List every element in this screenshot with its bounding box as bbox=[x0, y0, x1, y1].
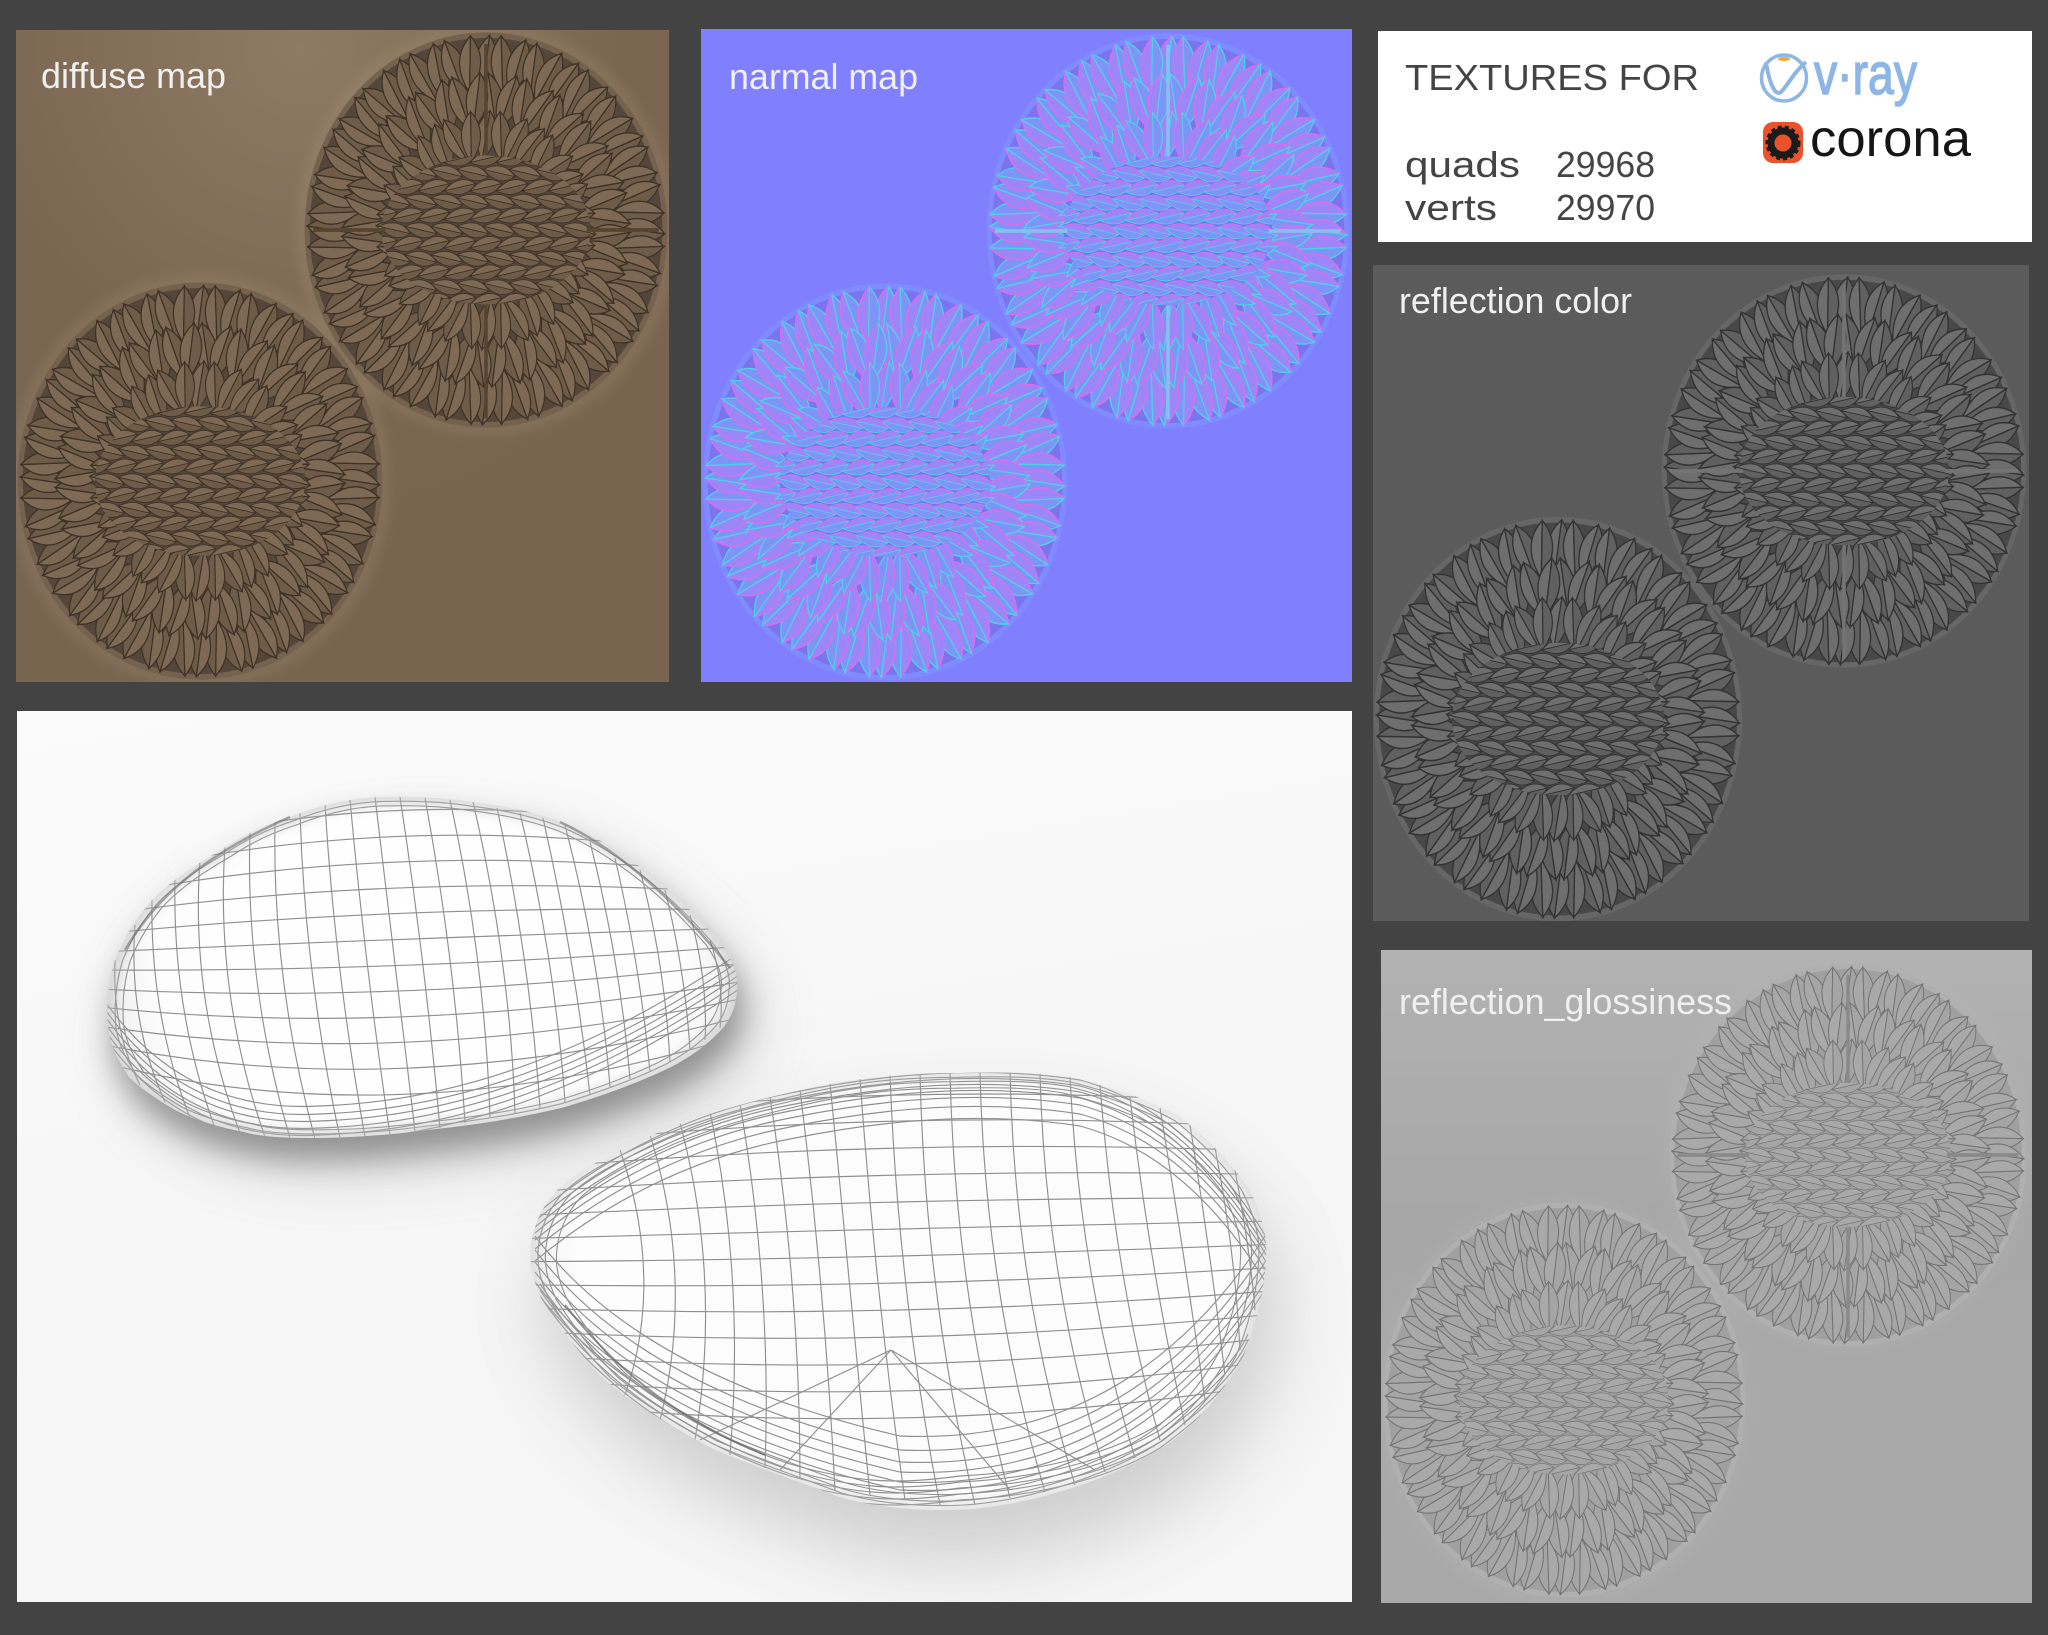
panel: reflection glossiness bbox=[1366, 946, 2043, 1616]
mesh: upper stone bbox=[100, 797, 745, 1142]
texture disc: lower bbox=[1384, 1204, 1744, 1596]
icon: v-ray logo: v·ray bbox=[1814, 42, 1917, 107]
label: reflection glossiness: reflection_glossiness bbox=[1399, 981, 1732, 1022]
text: verts value: 29970 bbox=[1556, 187, 1655, 228]
text: quads label: quads bbox=[1405, 144, 1520, 185]
panel: normal map bbox=[686, 15, 1366, 699]
texture disc: lower bbox=[703, 284, 1067, 680]
icon: corona logo: corona bbox=[1810, 110, 1971, 168]
panel: textures info bbox=[1378, 31, 2032, 242]
icon: v-ray logo bbox=[1762, 42, 1917, 107]
text: quads value: 29968 bbox=[1556, 144, 1655, 185]
texture disc: upper bbox=[986, 34, 1350, 428]
panel: diffuse map bbox=[1, 14, 684, 698]
texture disc: upper bbox=[1671, 966, 2025, 1344]
label: normal map: narmal map bbox=[729, 56, 918, 97]
label: reflection color: reflection color bbox=[1399, 280, 1632, 321]
mesh: bowl bbox=[530, 1072, 1266, 1510]
texture disc: lower bbox=[18, 282, 382, 680]
panel: reflection color bbox=[1357, 256, 2043, 940]
panel: wireframe render bbox=[17, 711, 1352, 1602]
heading: textures for: TEXTURES FOR bbox=[1405, 57, 1699, 98]
texture disc: upper bbox=[304, 32, 668, 428]
texture disc: upper bbox=[1662, 274, 2026, 668]
texture disc: lower bbox=[1374, 517, 1742, 921]
text: verts label: verts bbox=[1405, 187, 1497, 228]
label: diffuse map: diffuse map bbox=[41, 55, 226, 96]
